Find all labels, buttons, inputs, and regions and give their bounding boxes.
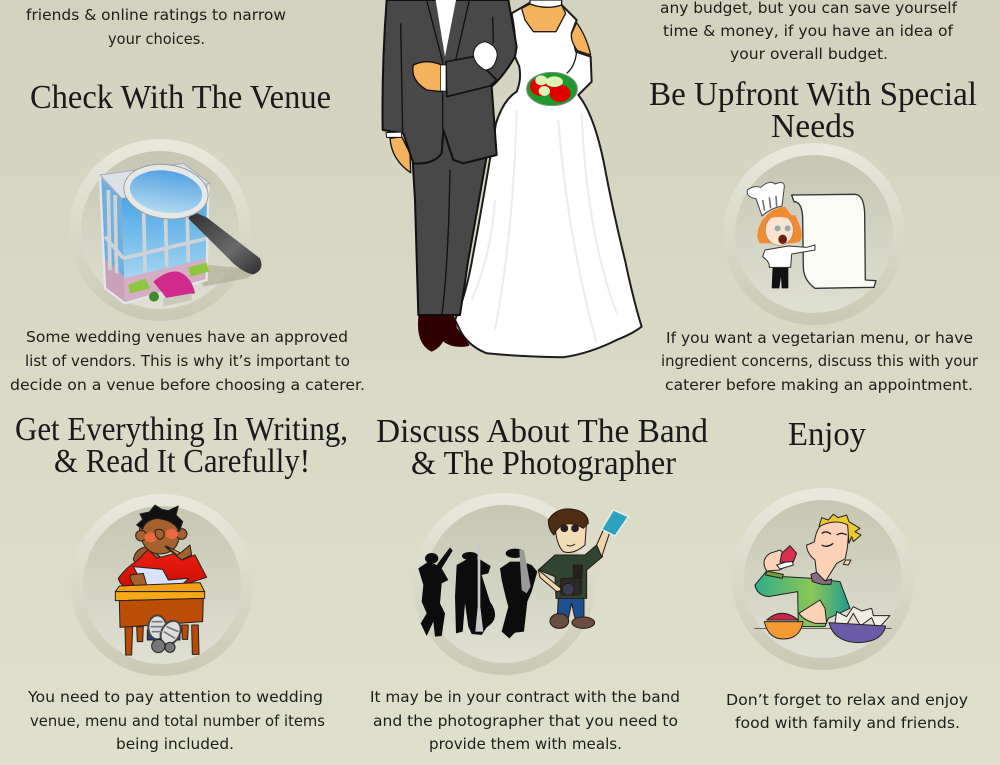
icon: man eating snacks: [754, 514, 892, 643]
text block: venue: Some wedding venues have an approved: [26, 328, 348, 346]
text block: in writing: venue, menu and total number of items: [30, 712, 325, 730]
medallion: writing: [71, 494, 253, 676]
text block: special needs: caterer before making an appointment.: [665, 376, 973, 394]
heading: check with the venue: Check With The Venue: [30, 79, 331, 116]
icon: student at desk: [115, 505, 207, 655]
panel: special needs: [649, 76, 979, 394]
heading: band and photographer: Discuss About The Band: [376, 413, 708, 450]
text block: special needs: If you want a vegetarian menu, or have: [666, 329, 973, 347]
text block: budget: [660, 0, 958, 63]
text block: budget: your overall budget.: [730, 45, 888, 63]
icon: photographer: [538, 509, 628, 628]
medallion: band: [413, 493, 595, 675]
text block: in writing: being included.: [116, 735, 234, 753]
panel: band and photographer: [370, 413, 708, 753]
text block: venue: decide on a venue before choosing a caterer.: [10, 376, 365, 394]
text block: venue: list of vendors. This is why it’s important to: [25, 352, 350, 370]
text block: enjoy: Don’t forget to relax and enjoy: [726, 691, 968, 709]
panel: check with the venue: [10, 79, 365, 394]
medallion: enjoy: [732, 488, 914, 670]
text block: special needs: [661, 329, 979, 394]
panel: get everything in writing: [15, 411, 348, 753]
icon: building with magnifying glass: [100, 159, 261, 307]
text block: enjoy: [726, 691, 968, 732]
groom: [382, 0, 517, 351]
icon: jazz musicians silhouettes: [418, 545, 537, 638]
illustration: bride and groom: [382, 0, 642, 357]
text block: band: and the photographer that you need to: [373, 712, 678, 730]
bouquet: [527, 72, 577, 106]
heading: be upfront: Be Upfront With Special: [649, 76, 977, 113]
text block: enjoy: food with family and friends.: [735, 714, 960, 732]
icon: chef with menu scroll: [747, 182, 876, 288]
text block: budget: time & money, if you have an idea of: [663, 22, 954, 40]
heading: in writing: Get Everything In Writing,: [15, 411, 348, 448]
heading: band and photographer: [376, 413, 708, 482]
heading: be upfront: Needs: [771, 108, 855, 145]
bride: [455, 0, 642, 357]
text block: band: provide them with meals.: [429, 735, 622, 753]
heading: in writing: & Read It Carefully!: [54, 443, 310, 480]
heading: band and photographer: & The Photographer: [411, 445, 677, 482]
heading: be upfront: [649, 76, 977, 145]
text block: band: It may be in your contract with the band: [370, 688, 680, 706]
heading: enjoy: Enjoy: [788, 416, 866, 453]
text block: in writing: [27, 688, 325, 753]
text block: special needs: ingredient concerns, discuss this with your: [661, 352, 979, 370]
medallion: chef: [723, 143, 905, 325]
text block: ratings: friends & online ratings to narrow: [26, 6, 286, 24]
heading: in writing: [15, 411, 348, 480]
medallion: venue: [69, 139, 251, 321]
text block: ratings: your choices.: [108, 30, 205, 48]
text block: band: [370, 688, 680, 753]
panel: enjoy: [726, 416, 968, 732]
text block: ratings: [26, 6, 286, 48]
text block: venue: [10, 328, 365, 394]
text block: in writing: You need to pay attention to wedding: [27, 688, 323, 706]
